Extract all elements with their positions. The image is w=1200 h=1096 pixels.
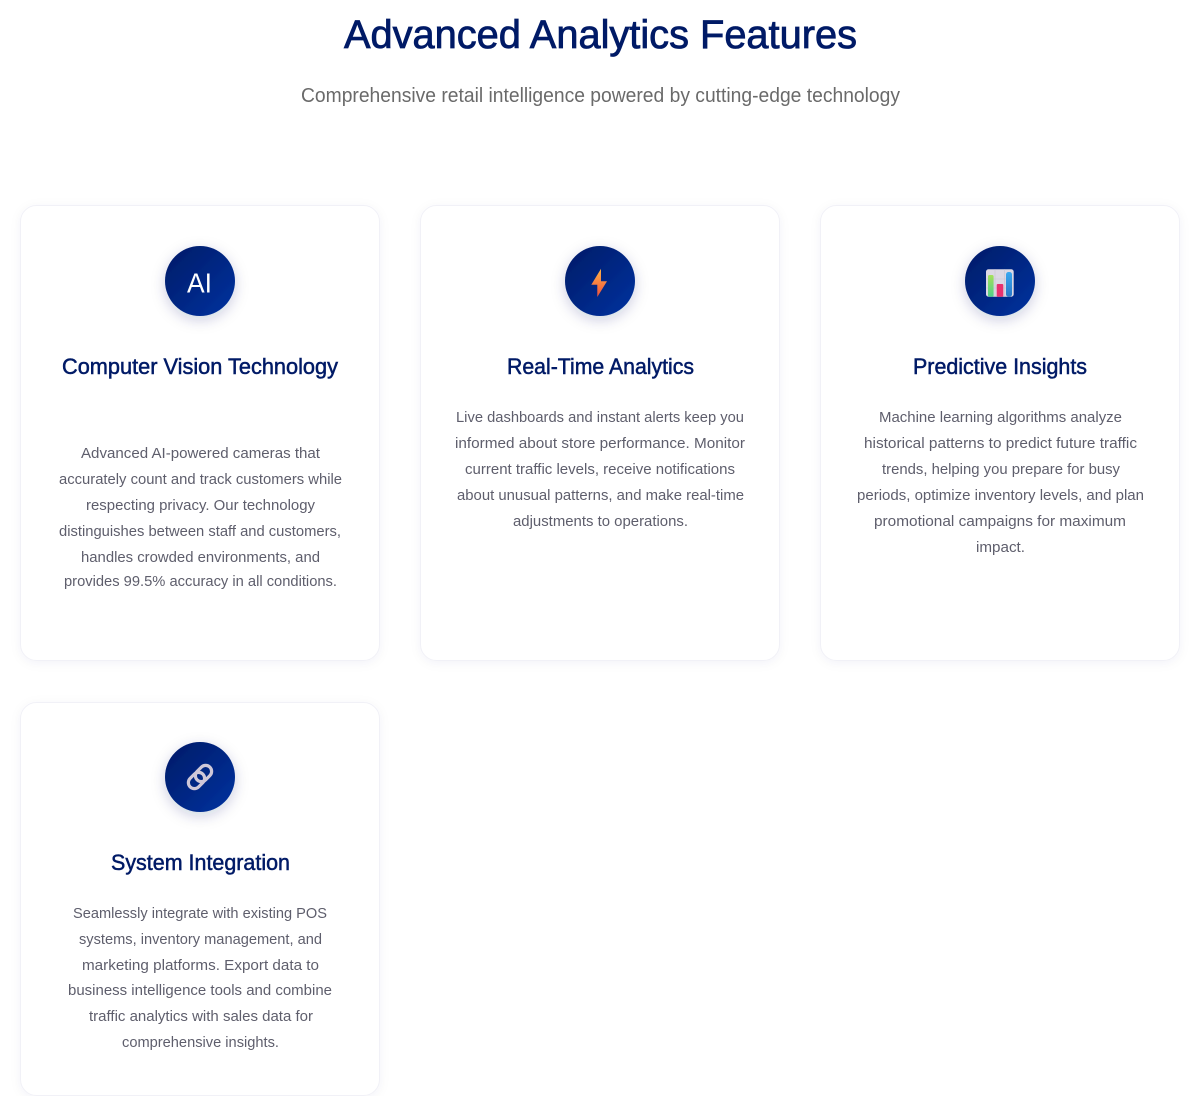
text block: integration description: comprehensive insights.: [122, 1034, 279, 1051]
text block: computer vision description: distinguishes between staff and customers,: [59, 523, 341, 540]
icon: lightning bolt: [565, 246, 635, 316]
panel: predictive insights: [820, 206, 1180, 660]
text block: predictive description: Machine learning algorithms analyze: [879, 409, 1122, 426]
text block: computer vision description: handles crowded environments, and: [81, 549, 320, 566]
text block: computer vision description: Advanced AI-powered cameras that: [81, 445, 321, 462]
heading: predictive insights: Predictive Insights: [913, 354, 1087, 379]
text block: computer vision description: [59, 445, 342, 590]
icon: chain link: [165, 742, 235, 812]
text block: real-time description: [455, 409, 745, 530]
text block: real-time description: adjustments to operations.: [513, 513, 688, 530]
title: Advanced Analytics Features: [344, 13, 857, 57]
text block: predictive description: [857, 409, 1144, 556]
text block: computer vision description: accurately count and track customers while: [59, 471, 342, 488]
panel: real-time analytics: [420, 206, 780, 660]
heading: real-time analytics: Real-Time Analytics: [507, 354, 694, 379]
subtitle: Comprehensive retail intelligence powered by cutting-edge technology: [301, 85, 900, 107]
text block: computer vision description: provides 99.5% accuracy in all conditions.: [64, 573, 337, 590]
icon: AI: [165, 246, 235, 316]
panel: system integration: [20, 702, 380, 1096]
text block: computer vision description: respecting privacy. Our technology: [86, 497, 315, 514]
text block: integration description: business intelligence tools and combine: [68, 982, 332, 999]
text block: integration description: systems, inventory management, and: [79, 931, 322, 948]
text block: predictive description: historical patterns to predict future traffic: [864, 435, 1138, 452]
heading: system integration: System Integration: [111, 850, 290, 875]
text block: real-time description: informed about store performance. Monitor: [455, 435, 745, 452]
text block: predictive description: trends, helping you prepare for busy: [882, 461, 1120, 478]
text block: integration description: Seamlessly integrate with existing POS: [73, 905, 327, 922]
text block: predictive description: impact.: [976, 539, 1025, 556]
icon: AI: AI: [187, 268, 212, 298]
icon: bar chart: [965, 246, 1035, 316]
text block: real-time description: about unusual patterns, and make real-time: [457, 487, 744, 504]
text block: real-time description: Live dashboards and instant alerts keep you: [456, 409, 744, 426]
text block: integration description: [68, 905, 332, 1051]
text block: integration description: traffic analytics with sales data for: [89, 1008, 313, 1025]
panel: computer vision technology: [20, 206, 380, 660]
text block: predictive description: promotional campaigns for maximum: [874, 513, 1126, 530]
text block: integration description: marketing platforms. Export data to: [82, 957, 319, 974]
text block: real-time description: current traffic levels, receive notifications: [465, 461, 735, 478]
text block: predictive description: periods, optimize inventory levels, and plan: [857, 487, 1144, 504]
heading: computer vision technology: Computer Vision Technology: [62, 354, 338, 379]
